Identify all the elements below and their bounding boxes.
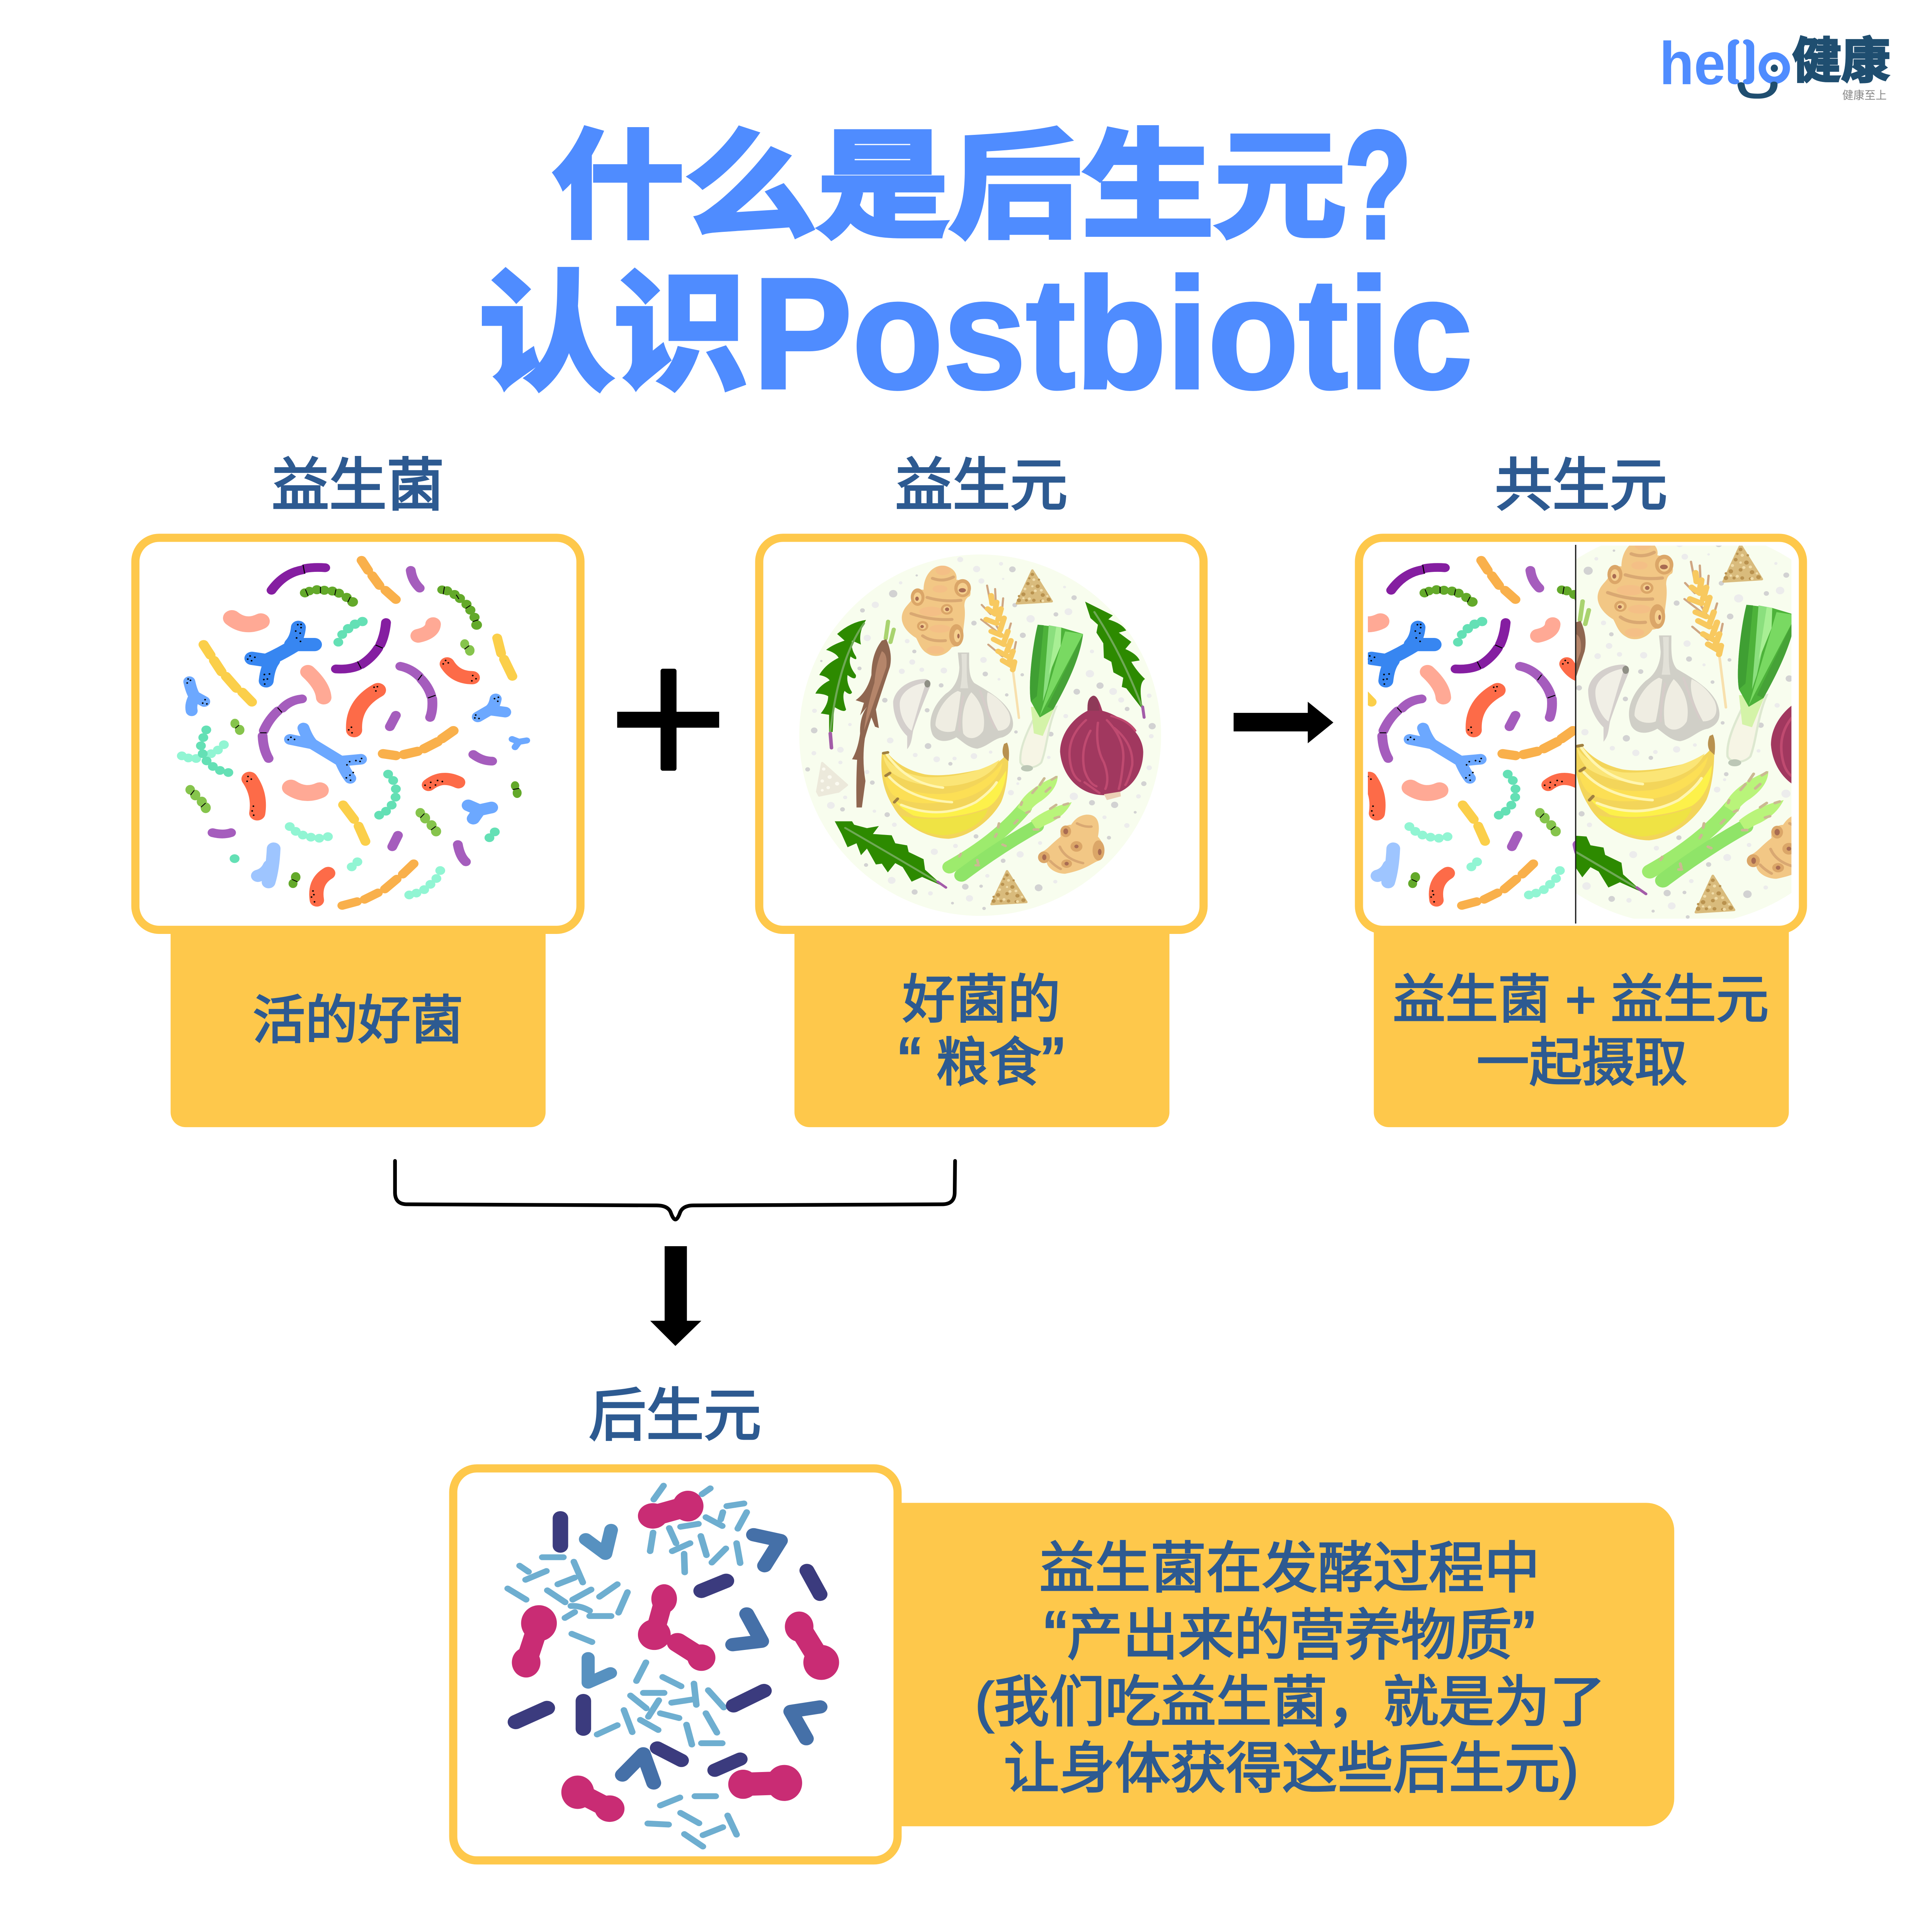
divider line (1575, 545, 1576, 923)
food half (1576, 546, 1791, 919)
garlic clove (893, 679, 930, 749)
burdock root (852, 621, 894, 808)
heading: 益生元: 益生元 (895, 453, 1068, 517)
description box: (我们吃益生菌，就是为了 (975, 1671, 1605, 1733)
caption box: 好菌的粮食: “ (898, 1024, 922, 1101)
caption box: 好菌的粮食: 粮食 (922, 1033, 1041, 1092)
rice pile (817, 763, 847, 796)
description box: “ (1044, 1597, 1067, 1675)
caption box: 好菌的粮食 (794, 890, 1169, 1127)
title: line 2 (479, 246, 1473, 422)
heading: 后生元: 后生元 (589, 1383, 761, 1448)
grain pile bottom (992, 871, 1026, 904)
logo: hello健康: 健康 (1792, 34, 1890, 88)
leaf left (815, 620, 866, 748)
heading: 益生菌: 益生菌 (272, 453, 444, 517)
panel: prebiotics foods (759, 538, 1204, 930)
logo: hello健康 (1659, 30, 1890, 102)
leek (1020, 625, 1083, 772)
caption box: 好菌的粮食: ” (1041, 1024, 1065, 1101)
logo: hello健康: 健康至上 (1842, 89, 1887, 102)
caption box: 益生菌+益生元一起摄取: 益生菌 + 益生元 (1393, 970, 1769, 1029)
description box: 让身体获得这些后生元) (1004, 1738, 1578, 1800)
postbiotics illustration (508, 1486, 839, 1847)
title: line 1: ? (1345, 100, 1412, 270)
heading: 共生元: 共生元 (1495, 453, 1667, 517)
leaf right (1085, 602, 1145, 718)
title: line 2: Postbiotic (753, 246, 1473, 422)
leaf bottom (835, 821, 946, 888)
food illustration (799, 554, 1161, 916)
panel: synbiotics half and half (1355, 534, 1807, 933)
wheat (981, 585, 1019, 718)
panel: postbiotics (453, 1468, 898, 1861)
title: line 2: 认识 (479, 262, 748, 406)
ginger top (902, 566, 971, 656)
asparagus (949, 776, 1072, 875)
brace (395, 1161, 955, 1219)
banana (881, 743, 1009, 839)
garlic bulb (930, 653, 1013, 749)
arrow down (650, 1246, 701, 1346)
plus sign (617, 669, 719, 771)
ginger bottom (1038, 815, 1104, 874)
caption box: 好菌的粮食: 好菌的 (902, 970, 1060, 1029)
bacteria illustration (177, 560, 527, 905)
description box: 产出来的营养物质 (1067, 1604, 1512, 1667)
title: line 1: 什么是后生元 (552, 121, 1346, 252)
logo: hello健康: he (1659, 30, 1725, 97)
panel: probiotics bacteria (135, 538, 580, 930)
caption box: 活的好菌: 活的好菌 (253, 991, 463, 1050)
caption box: 益生菌+益生元一起摄取: 一起摄取 (1476, 1033, 1687, 1092)
caption box: 益生菌+益生元一起摄取 (1374, 890, 1789, 1127)
caption box: 活的好菌 (171, 890, 546, 1127)
description box (853, 1503, 1674, 1826)
description box: 益生菌在发酵过程中 (1039, 1537, 1540, 1599)
description box: ” (1512, 1597, 1535, 1675)
red onion (1060, 696, 1143, 800)
bacteria half (1368, 556, 1575, 910)
arrow right (1234, 702, 1333, 743)
grain pile (1017, 570, 1052, 604)
